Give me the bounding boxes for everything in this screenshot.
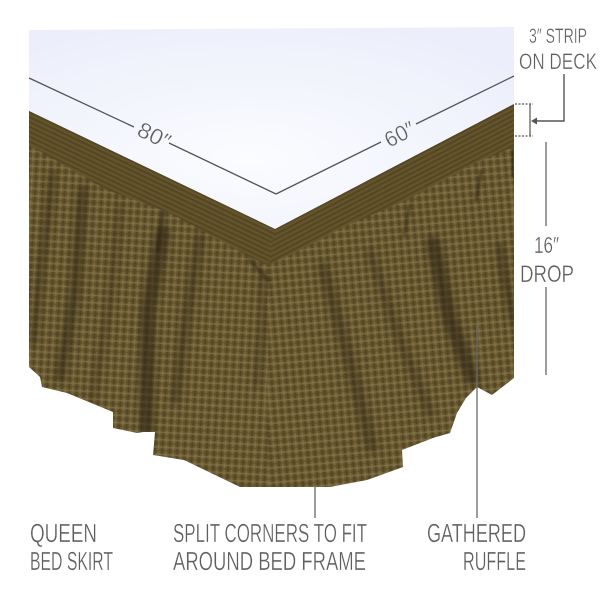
callout: 16 inch drop: DROP xyxy=(520,261,574,288)
label: split corners xyxy=(173,487,367,576)
bed skirt fabric xyxy=(25,95,520,500)
label: split corners: AROUND BED FRAME xyxy=(173,546,366,576)
pleat shadows xyxy=(33,150,514,487)
label: queen bed skirt xyxy=(30,518,113,576)
dimension: 60 inch length xyxy=(276,76,514,194)
label: gathered ruffle: RUFFLE xyxy=(463,546,526,576)
label: gathered ruffle: GATHERED xyxy=(427,518,526,548)
callout: 16 inch drop: 16″ xyxy=(534,232,559,258)
label: split corners: SPLIT CORNERS TO FIT xyxy=(173,518,367,548)
dimension: 80 inch width: 80″ xyxy=(133,117,175,154)
label: gathered ruffle xyxy=(427,325,526,576)
woven fabric panels xyxy=(25,95,520,500)
dimension: 60 inch length: 60″ xyxy=(380,116,419,152)
callout: 16 inch drop xyxy=(520,142,574,375)
top deck band xyxy=(25,100,520,265)
label: queen bed skirt: BED SKIRT xyxy=(30,546,113,576)
callout: 3 inch strip on deck xyxy=(515,25,597,136)
dimension: 80 inch width xyxy=(29,78,276,194)
label: queen bed skirt: QUEEN xyxy=(30,518,97,548)
white bed sheet xyxy=(29,27,514,229)
